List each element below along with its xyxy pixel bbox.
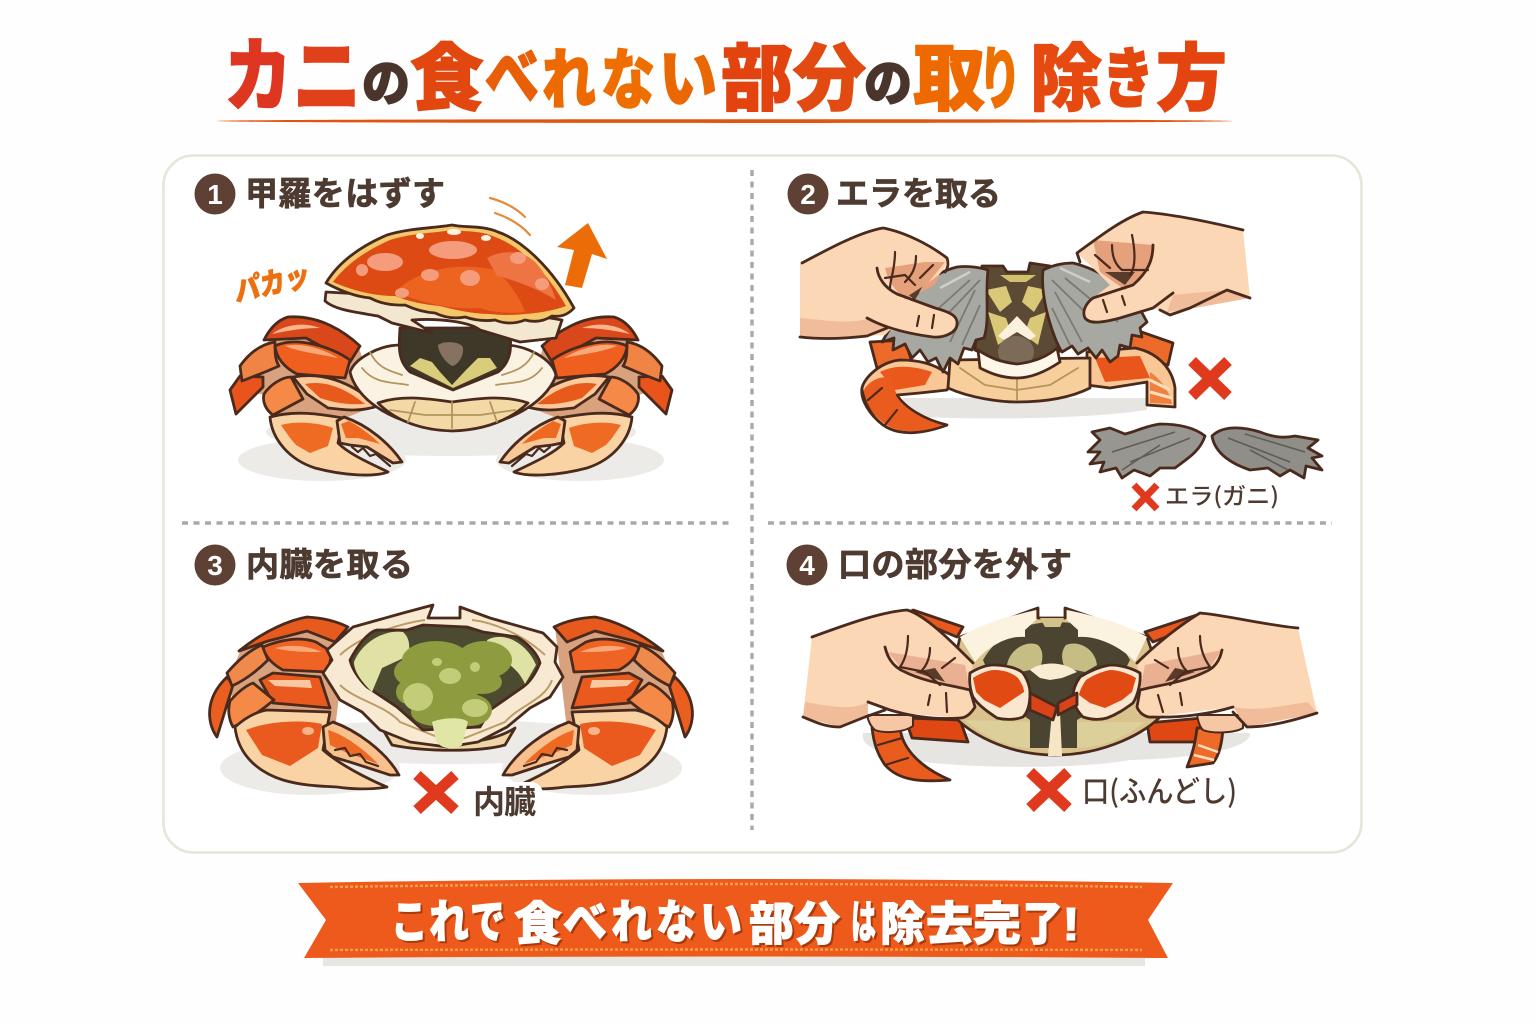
banner text: べ: [563, 896, 607, 948]
right hand: [1077, 212, 1250, 322]
step 3 heading: 内臓を取る: [246, 546, 413, 583]
crab center: [975, 263, 1062, 378]
banner shadow: [323, 955, 1145, 966]
banner shadow text: れ: [613, 898, 654, 950]
banner text: 除: [880, 898, 925, 950]
title underline: [217, 119, 1233, 123]
step 4 heading: 口の部分を外す: [838, 546, 1072, 583]
title: ニ: [293, 28, 361, 127]
title: の: [864, 56, 912, 112]
title: れ: [542, 43, 596, 117]
banner text: い: [700, 896, 742, 948]
crab legs left: [230, 317, 402, 475]
title: 食: [410, 39, 484, 120]
step 1 heading: 甲羅をはずす: [245, 175, 445, 212]
banner shadow text: !: [1064, 900, 1082, 952]
step 2 heading: [788, 174, 1001, 214]
left hand: [800, 228, 957, 339]
arrow up: [557, 223, 607, 288]
banner shadow text: 了: [1024, 900, 1065, 952]
banner shadow text: 部: [751, 900, 796, 952]
banner text: で: [470, 896, 505, 948]
title: べ: [485, 40, 539, 114]
banner text: 完: [973, 898, 1021, 950]
title: 分: [793, 39, 866, 120]
x mark and label: 内臓: [473, 784, 536, 820]
banner shadow text: 分: [796, 900, 842, 952]
shadow: [220, 720, 682, 795]
shadow: [863, 733, 1250, 767]
banner shadow text: れ: [431, 898, 471, 950]
onomatopoeia: パカッ: [235, 259, 310, 309]
banner shadow text: い: [702, 898, 744, 950]
motion lines: [490, 198, 530, 235]
banner shadow text: で: [472, 898, 507, 950]
banner shadow text: 食: [516, 900, 564, 952]
mouth parts held by fingers: [970, 665, 1140, 720]
title: い: [659, 42, 717, 116]
step 4 heading: 4: [799, 550, 815, 581]
banner text: 部: [749, 898, 794, 950]
x mark and label: [1030, 767, 1237, 811]
banner text: 食: [514, 898, 562, 950]
shadow: [903, 398, 1147, 418]
banner text: 了: [1022, 898, 1063, 950]
banner text: !: [1062, 898, 1080, 950]
step 2 heading: エラを取る: [836, 175, 1001, 212]
lifted shell: [325, 225, 574, 342]
banner text: 分: [794, 898, 840, 950]
banner text: な: [656, 896, 696, 948]
title: 部: [721, 39, 793, 120]
crab legs right: [503, 616, 692, 789]
banner shadow text: は: [853, 898, 878, 950]
banner shadow text: こ: [393, 898, 430, 950]
title: カ: [224, 32, 292, 121]
title: 取: [913, 39, 985, 120]
step 3 heading: 3: [207, 550, 223, 581]
step 2 heading: 2: [800, 179, 816, 210]
banner text: [391, 896, 1080, 950]
crab shadow: [238, 408, 664, 481]
banner text: こ: [391, 896, 428, 948]
crab legs right: [500, 317, 672, 475]
x mark and label: [417, 775, 543, 820]
crab body: [945, 608, 1170, 756]
panel: step 2 remove gills: [788, 174, 1322, 511]
panel: step 4 remove mouth: [786, 544, 1317, 811]
banner ribbon: [298, 879, 1173, 958]
title: 除: [1030, 39, 1102, 120]
x mark: [1192, 361, 1228, 396]
crab legs: [872, 610, 1223, 781]
removed gills: [1088, 424, 1322, 478]
innards opening: [350, 625, 540, 730]
title: の: [362, 56, 410, 112]
title: り: [979, 42, 1021, 118]
step 1 heading: 1: [207, 179, 223, 210]
right hand: [1137, 613, 1317, 732]
banner shadow text: な: [658, 898, 698, 950]
banner shadow text: [393, 898, 1082, 952]
title: な: [601, 43, 655, 117]
title: [224, 28, 1227, 127]
banner shadow text: 除: [882, 900, 927, 952]
title: 方: [1156, 39, 1227, 120]
crab legs left: [210, 616, 399, 789]
banner shadow text: 去: [928, 900, 975, 952]
banner text: れ: [611, 896, 652, 948]
title: き: [1102, 42, 1154, 116]
crab lower body and legs: [862, 328, 1175, 433]
banner text: れ: [429, 896, 469, 948]
banner shadow text: 完: [975, 900, 1023, 952]
panel: step 3 remove innards: [194, 544, 692, 820]
step 3 heading: [194, 544, 413, 586]
panel card: [164, 156, 1362, 852]
banner shadow text: べ: [565, 898, 609, 950]
x mark and label: 口(ふんどし): [1082, 767, 1237, 811]
removed gills label: エラ(ガニ): [1165, 477, 1279, 511]
panel: step 1 remove shell: [194, 174, 672, 481]
open shell: [323, 605, 563, 750]
banner text: 去: [926, 898, 973, 950]
crab body: [350, 328, 556, 431]
left hand: [803, 610, 975, 732]
gills in crab: [882, 263, 1147, 372]
banner text: は: [851, 896, 876, 948]
